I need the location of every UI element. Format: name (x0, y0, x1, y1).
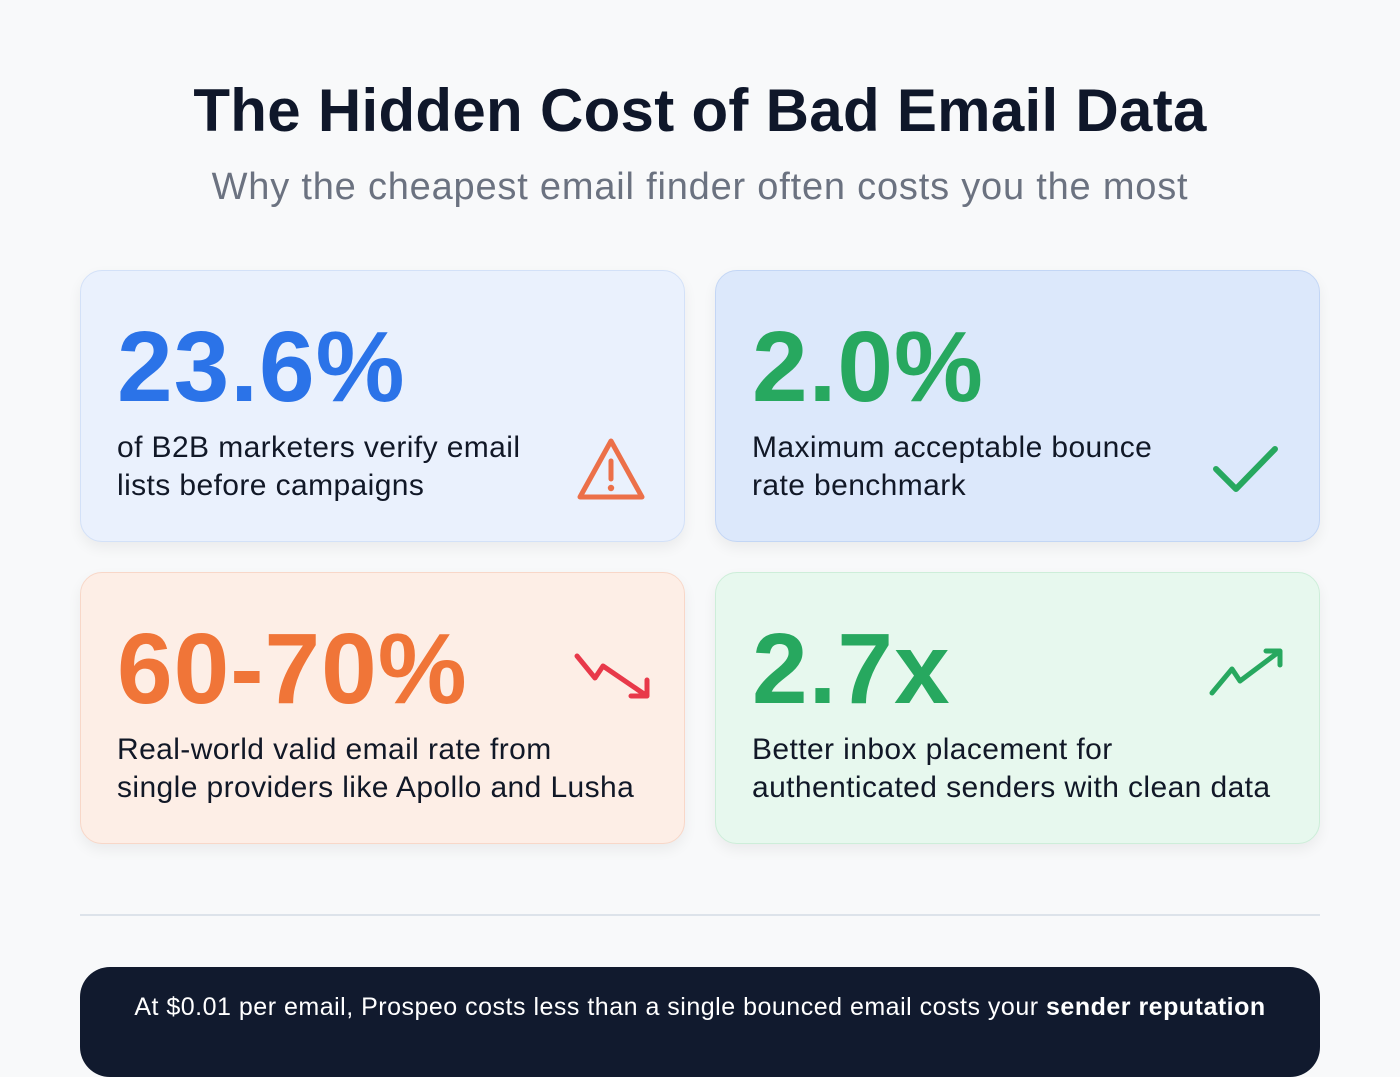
stat number: 2.0% (752, 311, 984, 423)
panel: 60-70% (80, 572, 685, 844)
description: of B2B marketers verify email (117, 431, 520, 464)
description: authenticated senders with clean data (752, 771, 1270, 804)
description: rate benchmark (752, 469, 966, 502)
icon: trend up (1210, 648, 1282, 696)
description: single providers like Apollo and Lusha (117, 771, 634, 804)
description (117, 431, 520, 502)
description (752, 431, 1152, 502)
icon: warning (578, 438, 644, 500)
description: Real-world valid email rate from (117, 733, 552, 766)
description (117, 733, 634, 804)
stat number: 2.7x (752, 613, 951, 725)
icon: trend down (574, 654, 650, 698)
panel: 23.6% (80, 270, 685, 542)
description: Maximum acceptable bounce (752, 431, 1152, 464)
panel: 2.7x (715, 572, 1320, 844)
description: lists before campaigns (117, 469, 424, 502)
panel: 2.0% (715, 270, 1320, 542)
stat number: 60-70% (117, 613, 468, 725)
icon: check (1213, 446, 1278, 492)
subtitle: Why the cheapest email finder often costs you the most (212, 166, 1188, 208)
title: The Hidden Cost of Bad Email Data (193, 77, 1207, 144)
stat number: 23.6% (117, 311, 406, 423)
description (752, 733, 1270, 804)
footer banner: At $0.01 per email, Prospeo costs less than a single bounced email costs your sender reputation (134, 993, 1266, 1021)
footer banner (80, 967, 1320, 1077)
description: Better inbox placement for (752, 733, 1113, 766)
